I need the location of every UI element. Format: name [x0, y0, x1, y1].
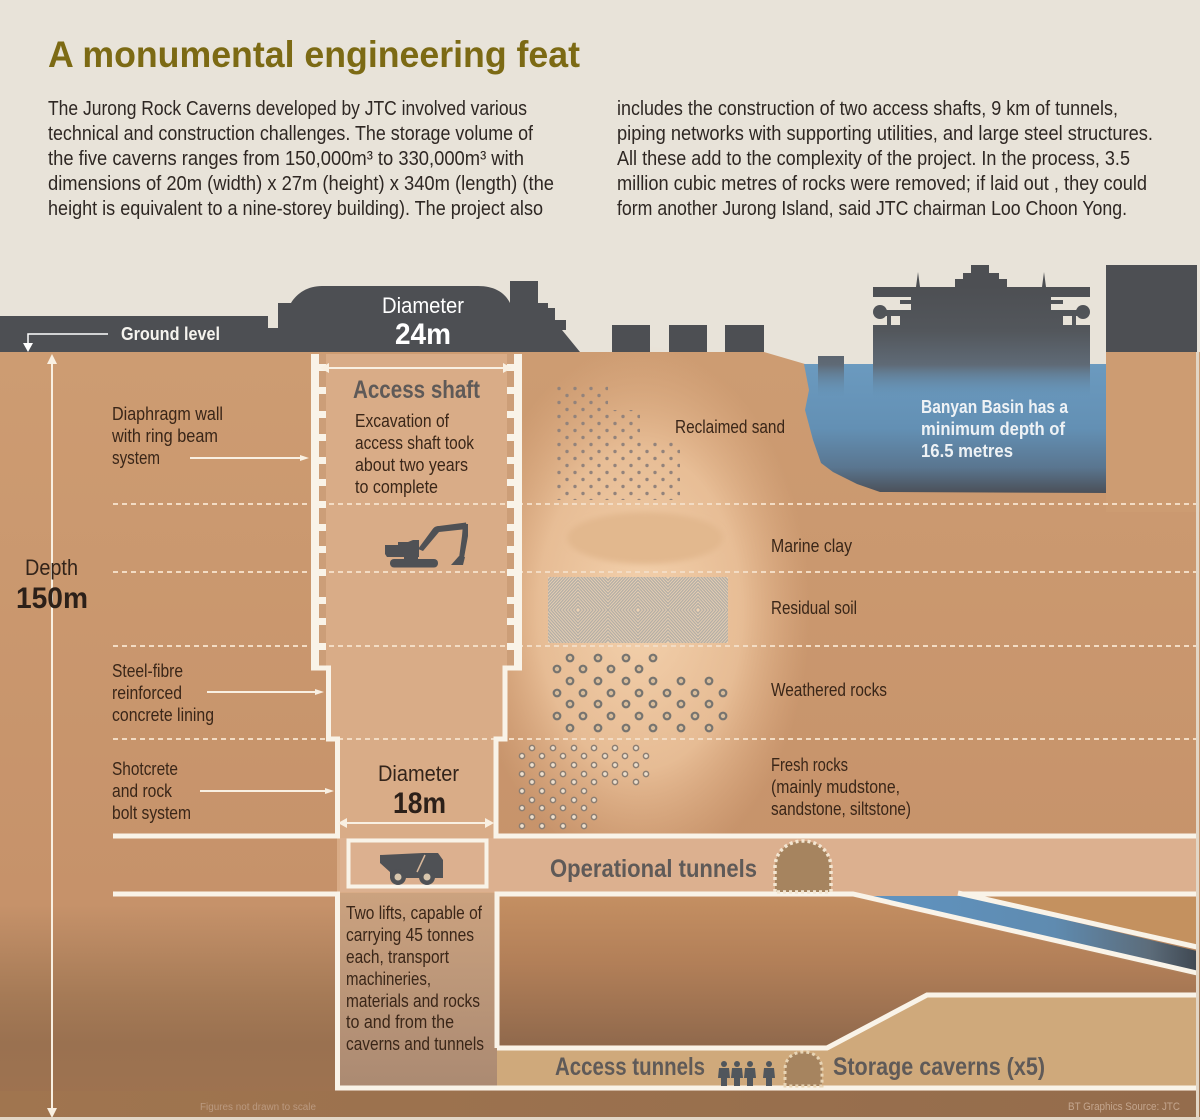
label: shotcrete: and rock — [112, 781, 173, 801]
containers — [612, 325, 764, 352]
heading: access tunnels: Access tunnels — [555, 1053, 705, 1081]
shaft wall ring beams — [316, 364, 517, 650]
ramp tunnel — [868, 896, 1197, 971]
bottom rock band — [0, 1091, 1197, 1117]
label: diaphragm wall — [111, 404, 223, 468]
heading: storage caverns: Storage caverns (x5) — [833, 1053, 1045, 1081]
lower shaft diameter label: 18m — [393, 787, 446, 820]
strata labels: Fresh rocks — [771, 755, 848, 775]
text block: intro right column: million cubic metres of rocks were removed; if laid out , they could — [617, 173, 1147, 195]
text: excavation note: about two years — [355, 455, 468, 475]
lower shaft diameter label: Diameter — [378, 761, 459, 786]
ground level label and arrow — [23, 324, 220, 352]
basin note — [921, 397, 1069, 461]
label: steel-fibre lining: Steel-fibre — [112, 661, 183, 681]
ship left side details — [873, 300, 912, 325]
lift note: each, transport — [346, 947, 449, 967]
central light glow — [470, 345, 810, 875]
shaft and tunnel walls — [113, 354, 1197, 1088]
heading: operational tunnels: Operational tunnels — [550, 855, 757, 883]
label: diaphragm wall: system — [112, 448, 160, 468]
pattern: reclaimed sand — [555, 385, 680, 500]
lift shaft fill — [339, 893, 497, 1088]
arrow: shotcrete — [200, 788, 334, 794]
text block: intro right column — [617, 98, 1153, 220]
text block: intro right column: piping networks with supporting utilities, and large steel structures. — [617, 123, 1153, 145]
text block: intro left column: the five caverns ranges from 150,000m³ to 330,000m³ with — [48, 148, 524, 170]
shaft wall inner strips — [318, 354, 514, 666]
depth label — [16, 555, 88, 615]
access shaft fill — [318, 354, 514, 893]
lift note: caverns and tunnels — [346, 1034, 484, 1054]
shaft diameter label — [382, 293, 464, 351]
label: steel-fibre lining — [112, 661, 214, 725]
label: shotcrete — [112, 759, 191, 823]
soil cross-section — [0, 352, 1200, 1120]
text block: intro left column: technical and construction challenges. The storage volume of — [48, 123, 533, 145]
arrow: steel-fibre lining — [207, 689, 324, 695]
text block: intro right column: includes the construction of two access shafts, 9 km of tunnels, — [617, 98, 1118, 120]
text: excavation note: Excavation of — [355, 411, 450, 431]
depth arrow — [47, 354, 57, 1118]
text block: intro left column: height is equivalent to a nine-storey building). The project also — [48, 198, 543, 220]
basin note: minimum depth of — [921, 419, 1066, 439]
label: steel-fibre lining: reinforced — [112, 683, 182, 703]
heading: access shaft: Access shaft — [353, 376, 481, 404]
text: excavation note: access shaft took — [355, 433, 475, 453]
strata labels: Residual soil — [771, 598, 857, 618]
small boat — [818, 356, 844, 396]
arrow: diaphragm wall — [190, 455, 309, 461]
pattern: fresh rocks — [519, 745, 649, 829]
ground surface silhouette — [0, 281, 580, 352]
page edge — [0, 352, 1200, 1120]
lift note: carrying 45 tonnes — [346, 925, 474, 945]
storage cavern fill — [497, 997, 1197, 1086]
credit: BT Graphics Source: JTC — [1068, 1101, 1180, 1113]
text block: intro right column: form another Jurong Island, said JTC chairman Loo Choon Yong. — [617, 198, 1127, 220]
lift note — [346, 903, 484, 1054]
text: excavation note: to complete — [355, 477, 438, 497]
label: steel-fibre lining: concrete lining — [112, 705, 214, 725]
ground level label and arrow: Ground level — [121, 324, 220, 344]
water: Banyan Basin — [804, 364, 1106, 493]
shaft diameter label: Diameter — [382, 293, 464, 318]
slope to basin — [764, 340, 1200, 366]
people icons — [718, 1061, 775, 1086]
depth label: 150m — [16, 582, 88, 615]
operational tunnel arch — [775, 841, 831, 892]
access tunnel arch — [785, 1052, 822, 1086]
strata labels: (mainly mudstone, — [771, 777, 900, 797]
text block: intro left column: The Jurong Rock Caverns developed by JTC involved various — [48, 98, 527, 120]
basin note: Banyan Basin has a — [921, 397, 1069, 417]
label: diaphragm wall: with ring beam — [111, 426, 218, 446]
depth label: Depth — [25, 555, 78, 580]
arrow: 24m diameter — [320, 363, 512, 373]
ship right side details — [1051, 300, 1090, 325]
label: shotcrete: Shotcrete — [112, 759, 178, 779]
strata labels: sandstone, siltstone) — [771, 799, 911, 819]
text block: intro left column: dimensions of 20m (width) x 27m (height) x 340m (length) (the — [48, 173, 554, 195]
excavator icon — [385, 522, 468, 568]
arrow: 18m diameter — [338, 818, 494, 828]
lift note: machineries, — [346, 969, 431, 989]
shaft diameter label: 24m — [395, 318, 451, 351]
basin note: 16.5 metres — [921, 441, 1013, 461]
lift note: materials and rocks — [346, 991, 480, 1011]
text: excavation note — [355, 411, 475, 497]
text block: intro left column — [48, 98, 554, 220]
pattern: marine clay — [567, 512, 723, 564]
footnote: Figures not drawn to scale — [200, 1102, 316, 1113]
lift note: Two lifts, capable of — [346, 903, 483, 923]
operational tunnel band — [340, 838, 1197, 897]
label: shotcrete: bolt system — [112, 803, 191, 823]
dump truck icon — [380, 853, 443, 885]
rock block between tunnels — [499, 897, 1197, 1045]
ship — [873, 265, 1090, 398]
lift note: to and from the — [346, 1012, 454, 1032]
strata labels: Weathered rocks — [771, 680, 887, 700]
label: diaphragm wall: Diaphragm wall — [112, 404, 223, 424]
text block: intro right column: All these add to the complexity of the project. In the process, 3.5 — [617, 148, 1130, 170]
title: A monumental engineering feat — [48, 34, 580, 75]
pattern: weathered rocks — [554, 655, 726, 731]
right dark block — [1106, 265, 1197, 352]
soil right of basin — [1106, 352, 1200, 512]
strata labels: Reclaimed sand — [675, 417, 785, 437]
lower shaft diameter label — [378, 761, 459, 820]
strata labels — [675, 417, 911, 819]
strata labels: Marine clay — [771, 536, 852, 556]
pattern: residual soil — [548, 577, 728, 643]
strata dashed lines — [113, 504, 1197, 739]
rock above ramp — [967, 897, 1197, 947]
